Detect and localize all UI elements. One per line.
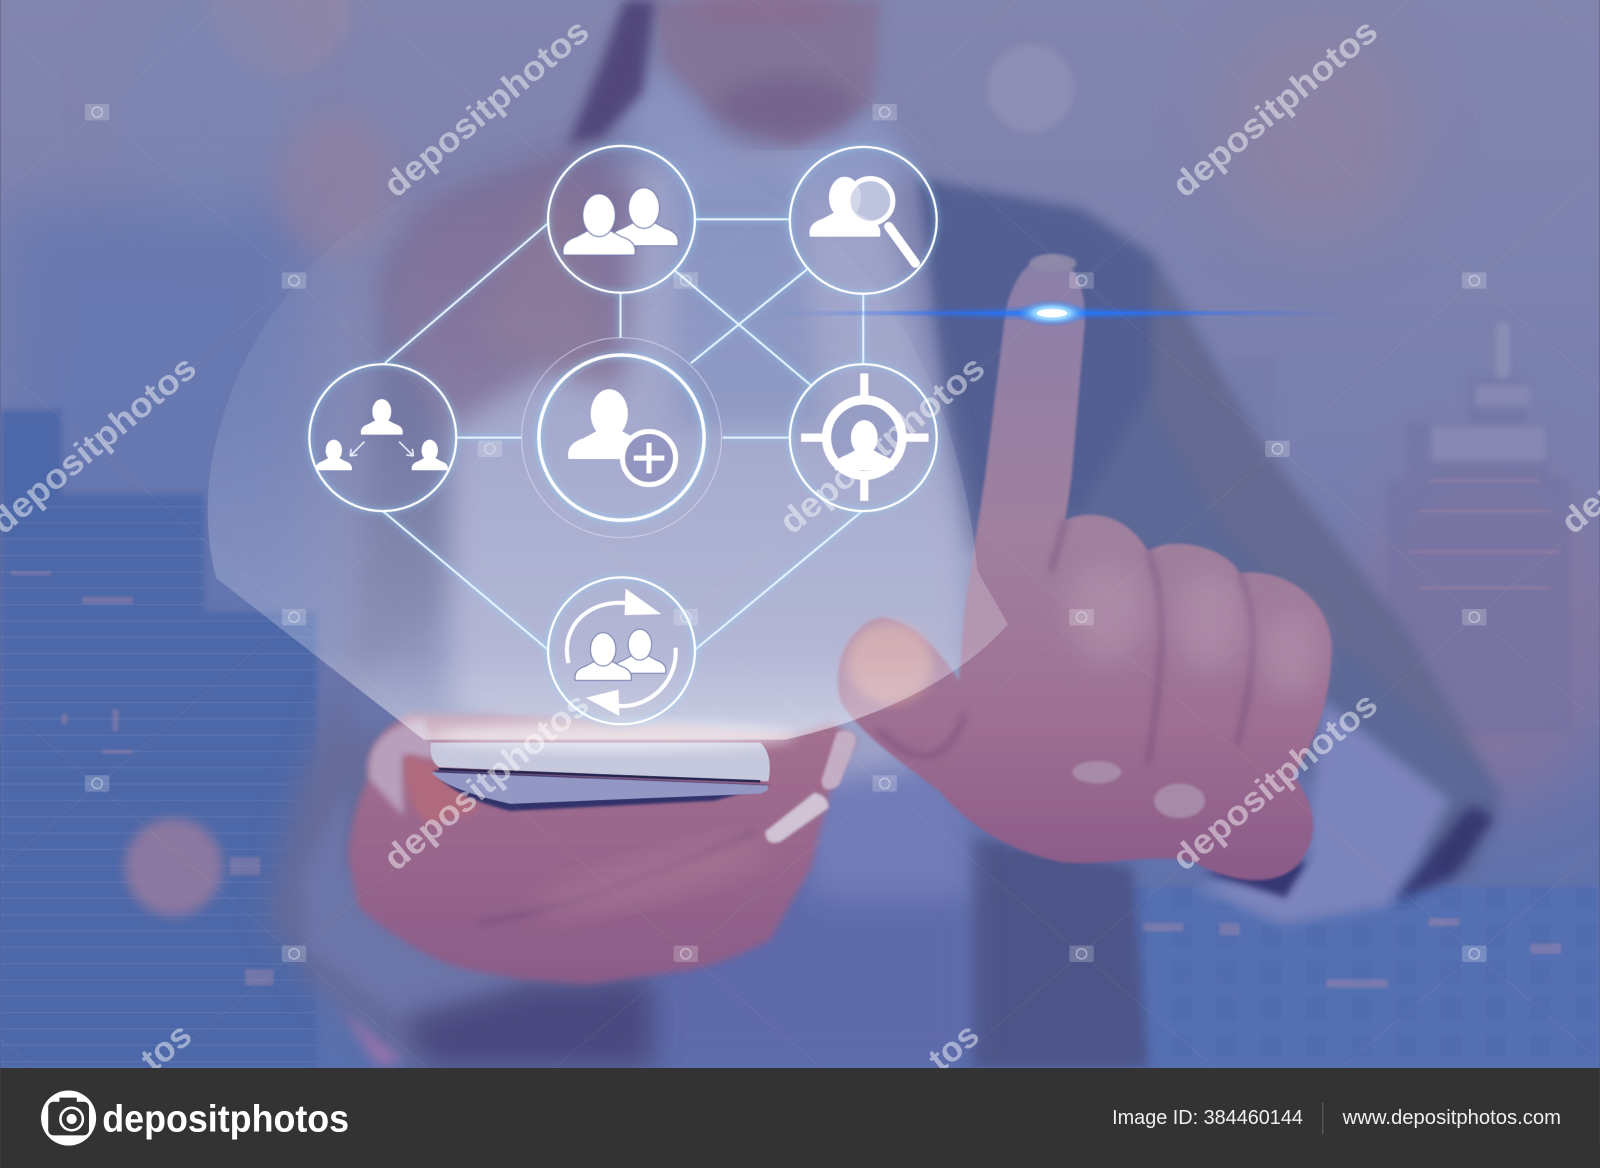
right hand pointing xyxy=(838,254,1332,880)
network diagram xyxy=(309,146,937,724)
bokeh lights xyxy=(123,0,1418,916)
left hand holding phone xyxy=(348,714,856,984)
smartphone xyxy=(430,743,770,811)
watermark text: depositphotos xyxy=(773,349,992,542)
logo icon xyxy=(41,1090,96,1146)
icon: target person xyxy=(801,373,929,501)
fingernails xyxy=(765,731,856,843)
icon: hierarchy of people xyxy=(316,399,448,470)
fingernails xyxy=(1030,254,1205,818)
icon: add person xyxy=(568,389,676,485)
collar xyxy=(628,61,918,204)
watermark text: tos xyxy=(134,1016,199,1079)
center outer ring xyxy=(522,338,721,538)
icon: people exchange arrows xyxy=(567,589,676,716)
lens flare on fingertip xyxy=(776,300,1347,326)
image id: Image ID: 384460144 xyxy=(1112,1107,1303,1129)
watermark text: tos xyxy=(921,1016,987,1079)
connector lines xyxy=(383,219,863,650)
watermark text: depositphotos xyxy=(1165,12,1385,205)
city windows xyxy=(10,479,1561,987)
logo wordmark: depositphotos xyxy=(102,1097,349,1139)
icon: person search xyxy=(809,177,915,263)
footer bar xyxy=(0,1068,1600,1168)
hair and face xyxy=(383,0,880,428)
watermark text: depositphotos xyxy=(377,12,597,205)
phone light glow xyxy=(429,722,796,751)
icon: two people xyxy=(563,188,678,255)
cuffs xyxy=(301,698,1495,1068)
node circles xyxy=(309,146,937,724)
woman: torso and jacket xyxy=(265,0,1502,1068)
watermark text: depositphotos xyxy=(1165,685,1385,878)
watermark text: depositphotos xyxy=(377,685,597,878)
knuckle highlights xyxy=(1066,561,1321,699)
watermark camera icons xyxy=(85,104,1487,962)
finger shading xyxy=(878,520,1253,765)
website: www.depositphotos.com xyxy=(1342,1107,1561,1129)
hologram projection beam xyxy=(208,149,1008,740)
